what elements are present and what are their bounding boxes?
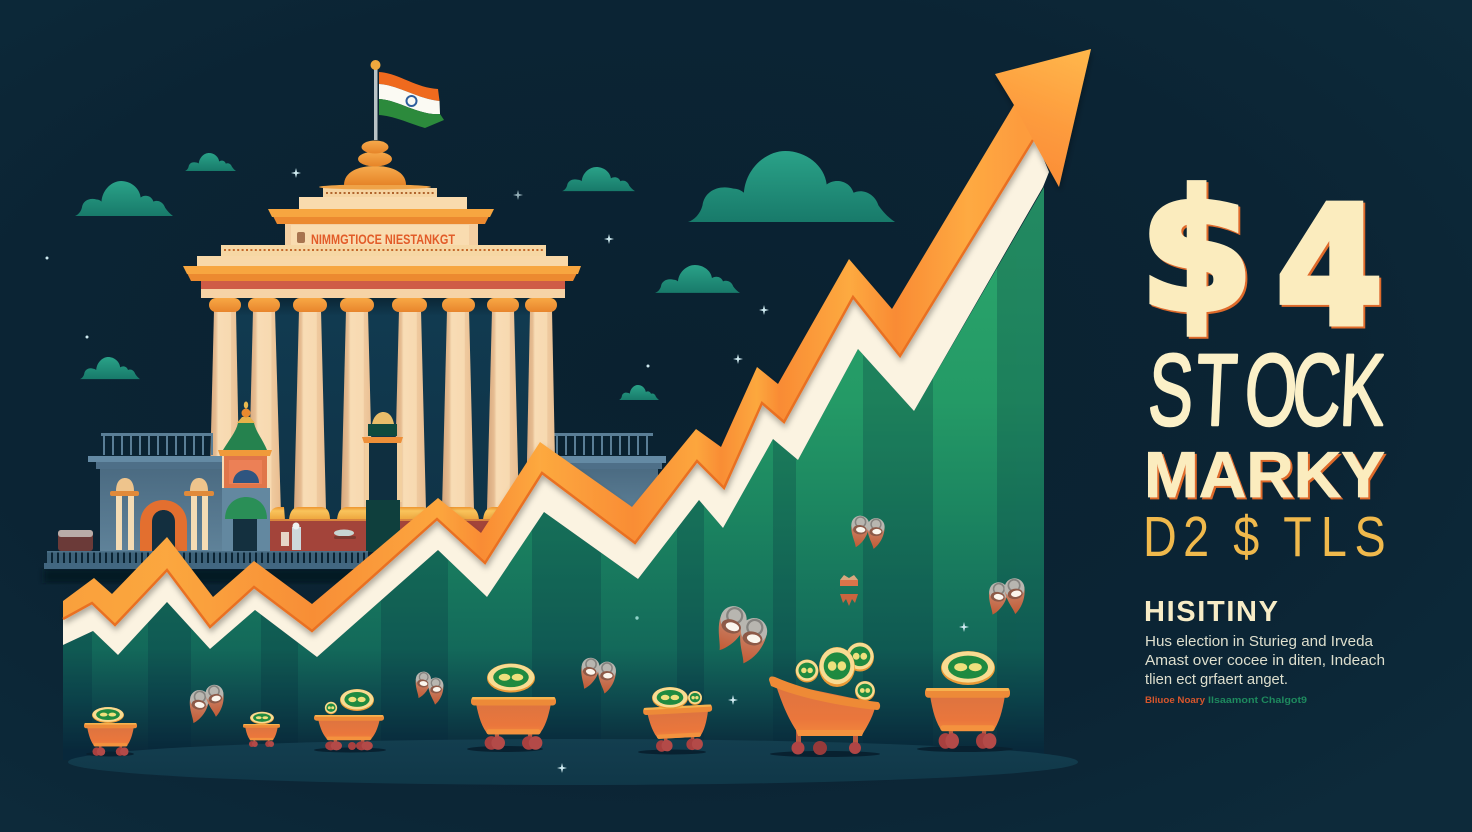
railing — [545, 433, 653, 445]
body copy: Hus election in Sturieg and Irveda — [1145, 634, 1374, 650]
token pair 5 — [849, 515, 885, 549]
terrace — [44, 551, 368, 583]
column capitals — [209, 298, 557, 312]
railing — [101, 433, 213, 445]
token pair 6 — [986, 577, 1028, 616]
source line — [1145, 695, 1307, 705]
lower entablature — [201, 289, 565, 298]
marky word: MARKY — [1144, 438, 1385, 511]
body copy: tlien ect grfaert anget. — [1145, 672, 1288, 688]
left annex building — [88, 402, 272, 551]
cart 6 — [769, 642, 880, 757]
orange ribbon and arrow head — [63, 49, 1091, 631]
cart 4 — [467, 664, 556, 752]
dotted band — [221, 245, 546, 256]
columns — [209, 310, 556, 515]
clouds — [75, 151, 895, 400]
d2s tls word: D2$ TLS — [1143, 506, 1386, 569]
stock word: STOCK — [1146, 334, 1387, 447]
orange arch door — [140, 500, 187, 551]
token pair 2 — [413, 671, 445, 705]
chart stars — [557, 616, 969, 773]
sky stars — [46, 168, 769, 368]
frieze with inscription: NIMMGTIOCE NIESTANKGT — [311, 231, 455, 247]
token pair 3 — [578, 656, 616, 694]
green area — [63, 180, 1044, 760]
history text block — [1144, 596, 1385, 705]
spiky token — [840, 575, 858, 606]
token pair 1 — [187, 683, 227, 725]
body copy: Amast over cocee in diten, Indeach — [1145, 653, 1385, 669]
source line: Ilsaamont Chalgot9 — [1208, 695, 1307, 705]
big dollar and four: $ — [1140, 156, 1253, 348]
trunk prop — [58, 530, 93, 551]
plinth ornaments — [281, 522, 356, 550]
back wall — [214, 298, 552, 523]
flag pole — [370, 60, 380, 140]
body copy — [1145, 634, 1385, 688]
red plinth wall — [269, 500, 501, 552]
cupola left — [110, 478, 139, 550]
parliament building — [183, 60, 581, 523]
cart 3 — [314, 689, 386, 752]
source line: Bliuoe Noary — [1145, 695, 1205, 705]
column bases — [269, 507, 500, 520]
upper cornice — [268, 209, 494, 224]
dome — [344, 140, 406, 185]
right title block — [1140, 156, 1387, 569]
dome plinth — [319, 184, 437, 197]
frieze with inscription — [285, 223, 478, 247]
cart 5 — [638, 687, 714, 754]
heading: HISITINY — [1144, 596, 1278, 628]
floor ellipse — [68, 739, 1078, 785]
falling tokens — [187, 515, 1028, 725]
cart 2 — [243, 712, 280, 747]
center door tower — [362, 412, 403, 502]
cupola right — [184, 478, 214, 550]
cream ribbon — [63, 133, 1049, 657]
clock tower — [218, 402, 272, 551]
rising stock chart — [63, 49, 1091, 760]
big dollar and four: 4 — [1276, 173, 1383, 362]
token pair 4 — [711, 603, 770, 667]
indian flag — [379, 72, 444, 128]
right annex building — [545, 433, 666, 519]
cart 7 — [917, 651, 1013, 752]
big dollar and four — [1140, 156, 1383, 362]
cart 1 — [84, 707, 137, 756]
main cornice — [183, 266, 581, 281]
